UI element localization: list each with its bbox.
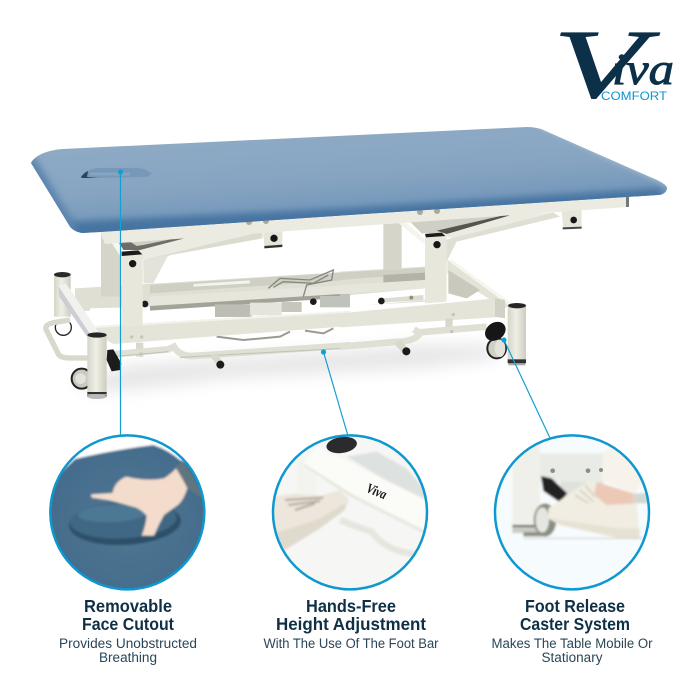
- rear wheel: [55, 319, 71, 335]
- logo: Viva Comfort: V: [553, 11, 661, 119]
- removable pad: [68, 510, 182, 546]
- front caster wheel: [72, 369, 92, 389]
- caption: foot release caster system: Makes The Table Mobile Or: [492, 636, 653, 651]
- caster wheel: [534, 503, 556, 537]
- foot bar: [113, 343, 350, 369]
- caption: foot release caster system: Caster System: [520, 614, 630, 634]
- table base frame, left half: [46, 228, 350, 399]
- right table bracket with bolt: [562, 209, 582, 229]
- caption: removable face cutout: Face Cutout: [82, 614, 174, 634]
- caster wheel: [487, 338, 506, 358]
- release pedal: [481, 318, 509, 345]
- caption: foot release caster system: [492, 596, 653, 665]
- shoe: [273, 490, 349, 550]
- face cutout: [81, 168, 152, 178]
- caption: removable face cutout: Breathing: [99, 650, 157, 665]
- table base frame, right half: [340, 209, 582, 365]
- table top upholstery: [28, 127, 670, 233]
- corner post: [508, 303, 526, 365]
- end rail to corner post: [447, 259, 512, 308]
- caption: hands-free height adjustment: [264, 596, 439, 651]
- detail circle: foot bar: [270, 432, 433, 595]
- ankle: [595, 482, 633, 506]
- logo: Viva Comfort: [553, 11, 674, 119]
- mini brand mark: Viva: [364, 481, 389, 503]
- far corner post: [54, 272, 71, 317]
- frame panel: [540, 453, 607, 482]
- floor shadow: [70, 345, 500, 392]
- caption: hands-free height adjustment: With The Use Of The Foot Bar: [264, 636, 439, 651]
- detail circle: caster: [493, 432, 657, 595]
- black pedal: [541, 476, 567, 502]
- far column: [101, 232, 120, 297]
- left brake pedal: [107, 349, 121, 371]
- motor housing: [142, 296, 350, 317]
- caption: removable face cutout: Provides Unobstructed: [59, 636, 197, 651]
- hand: [91, 468, 187, 536]
- leader line: face cutout: [118, 169, 123, 436]
- main front rail: [95, 311, 350, 344]
- near column with bolt: [425, 233, 455, 316]
- diagonal end rail: [58, 283, 98, 343]
- caption: removable face cutout: Removable: [84, 596, 172, 616]
- leader line: foot bar: [321, 349, 348, 436]
- top bracket brace: [397, 213, 560, 262]
- shoe: [548, 482, 640, 538]
- top bracket brace: [107, 232, 263, 283]
- logo: Viva Comfort: COMFORT: [601, 89, 668, 103]
- foot bar: [340, 520, 427, 557]
- detail circle: face cutout: [47, 432, 210, 595]
- corner post: [512, 442, 540, 529]
- caption: removable face cutout: [59, 596, 197, 665]
- far rail and centre panel: [75, 272, 350, 326]
- main front rail: [340, 298, 505, 327]
- far column: [383, 222, 402, 270]
- caption: hands-free height adjustment: Hands-Free: [306, 596, 396, 616]
- trouser leg: [602, 448, 642, 494]
- centre rails continuation: [340, 267, 425, 307]
- caption: foot release caster system: Foot Release: [525, 596, 625, 616]
- near corner post: [87, 332, 107, 399]
- sleeve: [175, 462, 202, 498]
- near column with bolt: [122, 250, 143, 339]
- foot bar continuation: [340, 318, 487, 355]
- table rail beneath the top: [100, 197, 629, 244]
- caption: hands-free height adjustment: Height Adjustment: [276, 614, 426, 634]
- leader line: caster: [501, 337, 550, 438]
- caption: foot release caster system: Stationary: [542, 650, 603, 665]
- cable bundle: [268, 270, 333, 297]
- foot bar loop: [46, 320, 90, 358]
- frame bar: [306, 460, 426, 505]
- logo: Viva Comfort: iva: [612, 45, 674, 94]
- black knob: [326, 436, 357, 454]
- table bracket with bolt: [263, 228, 282, 248]
- under-rail fittings: [217, 328, 333, 340]
